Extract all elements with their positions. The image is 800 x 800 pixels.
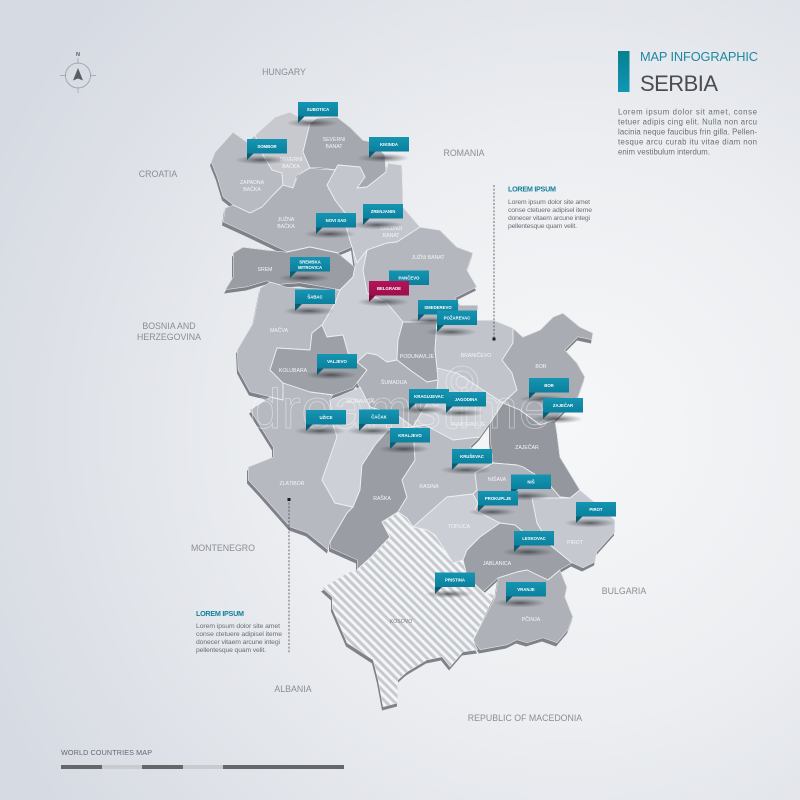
region: Toplica — [413, 494, 500, 563]
pin: Kruševac — [440, 449, 492, 474]
map of Serbia — [211, 112, 615, 707]
pin: Sremska Mitrovica — [278, 257, 330, 282]
pin: Pirot: PIROT — [589, 507, 603, 512]
region: Braničevo — [435, 320, 523, 403]
title: map infographic: MAP INFOGRAPHIC — [640, 49, 758, 64]
country labels: ALBANIA — [274, 684, 312, 694]
pin: Šabac: ŠABAC — [307, 294, 323, 300]
callout: top right: LOREM IPSUM — [508, 184, 556, 194]
title: Serbia: SERBIA — [640, 71, 718, 96]
pin: Sombor — [235, 139, 287, 164]
intro paragraph — [618, 108, 757, 156]
pin: Subotica — [286, 102, 338, 128]
title block — [618, 49, 758, 96]
region: Jablanica — [463, 523, 572, 592]
region labels: MORAVICA — [346, 399, 374, 405]
region labels: SEVERNI — [280, 157, 302, 163]
intro paragraph: tetuer adipis cing elit. Nulla non arcu — [618, 118, 757, 126]
callout: bottom left: LOREM IPSUM — [196, 609, 244, 618]
pin: Belgrade: BELGRADE — [377, 286, 401, 291]
region labels: SREM — [258, 267, 272, 273]
pin: Leskovac: LESKOVAC — [522, 536, 546, 541]
region labels: JABLANICA — [483, 561, 512, 567]
callout: top right: donecer vitaem arcune integi — [508, 215, 590, 222]
region labels: BAČKA — [243, 186, 261, 193]
watermark: dreamstime — [250, 377, 550, 440]
country labels: ROMANIA — [443, 148, 485, 158]
pin: Niš — [499, 474, 551, 500]
pin: Kikinda: KIKINDA — [380, 142, 398, 147]
pin: Valjevo: VALJEVO — [327, 359, 348, 364]
region labels: JUŽNI BANAT — [411, 253, 445, 261]
intro paragraph: Lorem ipsum dolor sit amet, conse — [618, 108, 757, 116]
country labels — [137, 67, 646, 723]
pin: Smederevo: SMEDEREVO — [424, 305, 452, 310]
intro paragraph: tesque arcu curab itu vitae diam non — [618, 138, 757, 146]
region: Moravica — [322, 387, 413, 507]
pin: Priština: PRISTINA — [445, 578, 465, 582]
pin: Priština — [425, 572, 475, 598]
region: Srem — [225, 247, 355, 290]
region: Pomoravlje — [413, 368, 503, 440]
region labels: ZLATIBOR — [280, 481, 305, 487]
callout: bottom left: conse ctetuere adipisel iteme — [196, 631, 282, 638]
country labels: MONTENEGRO — [191, 543, 255, 553]
pin: Požarevac — [425, 310, 477, 336]
region: Severna Bačka — [255, 112, 310, 188]
country labels: HERZEGOVINA — [137, 332, 201, 342]
callout: bottom left: donecer vitaem arcune integi — [196, 639, 280, 646]
country labels: BOSNIA AND — [142, 321, 196, 331]
region: Rasina — [398, 425, 493, 527]
region: Podunavlje — [397, 322, 438, 382]
pin: Zrenjanin: ZRENJANIN — [371, 209, 395, 214]
region labels: TOPLICA — [448, 524, 471, 530]
callout: top right: Lorem ipsum dolor site amet — [508, 199, 590, 206]
pin: Prokuplje: PROKUPLJE — [485, 496, 511, 501]
region: Nišava — [474, 462, 570, 531]
region labels: RAŠKA — [373, 495, 391, 502]
pin: Kragujevac: KRAGUJEVAC — [414, 394, 444, 399]
pin: Jagodina — [436, 392, 486, 417]
pin: Zrenjanin — [351, 204, 403, 230]
pin: Vranje — [494, 582, 546, 608]
icon: compass: N — [76, 52, 80, 58]
pin: Belgrade — [357, 281, 409, 306]
region labels: ZAPADNA — [240, 180, 265, 186]
pin: Pančevo — [389, 270, 429, 285]
region labels: BRANIČEVO — [461, 352, 491, 359]
pin: Zaječar — [531, 398, 583, 424]
region labels: POMORAVLJE — [450, 422, 486, 428]
pin: Smederevo — [408, 300, 458, 325]
pin: Čačak — [347, 410, 399, 436]
callout: bottom left: pellentesque quam velit. — [196, 647, 266, 654]
pin: Užice: UŽICE — [320, 415, 333, 420]
region labels: BAČKA — [277, 223, 295, 230]
region: Južni Banat — [363, 227, 478, 322]
country labels: BULGARIA — [602, 586, 646, 596]
region labels: BANAT — [326, 144, 343, 150]
region labels: JUŽNA — [278, 215, 295, 223]
pin: Bor: BOR — [544, 383, 555, 388]
region labels: PIROT — [567, 540, 584, 546]
region: Srednji Banat — [327, 163, 420, 263]
region labels: KOLUBARA — [279, 368, 308, 374]
title accent bar — [618, 51, 630, 92]
pin: Jagodina: JAGODINA — [455, 397, 477, 402]
pin: Kragujevac — [399, 389, 449, 414]
pin: Užice — [294, 410, 346, 436]
region labels: RASINA — [419, 484, 439, 490]
footer label: WORLD COUNTRIES MAP — [61, 748, 152, 757]
region: Bor — [502, 313, 593, 425]
region labels: NIŠAVA — [488, 476, 507, 483]
region labels: BANAT — [383, 233, 400, 239]
country labels: HUNGARY — [262, 67, 306, 77]
callout: bottom left: Lorem ipsum dolor site amet — [196, 623, 280, 630]
callout: top right — [492, 184, 592, 340]
region: Kolubara — [270, 325, 367, 395]
region labels: ŠUMADIJA — [381, 379, 408, 386]
intro paragraph: lacinia neque faucibus frin gilla. Pellen- — [618, 128, 757, 136]
region: Severni Banat — [303, 117, 386, 188]
region: Šumadija — [357, 353, 438, 427]
pin: Novi Sad: NOVI SAD — [326, 218, 346, 223]
region: Zlatibor — [248, 383, 353, 550]
callout: top right: pellentesque quam velit. — [508, 223, 577, 230]
pin: Valjevo — [305, 354, 357, 380]
pin: Zaječar: ZAJEČAR — [553, 403, 574, 408]
pin: Kruševac: KRUŠEVAC — [460, 454, 484, 459]
region labels: PODUNAVLJE — [400, 354, 435, 360]
pin: Kraljevo: KRALJEVO — [398, 433, 422, 438]
region: Pčinja — [473, 570, 573, 650]
region labels: SREDNJI — [380, 226, 402, 232]
region: Mačva — [237, 282, 340, 400]
region labels: KOSOVO — [390, 619, 412, 625]
callout: bottom left — [196, 498, 290, 654]
pin: Šabac — [283, 290, 335, 316]
pin: Niš: NIŠ — [527, 480, 535, 484]
pin: Prokuplje — [468, 491, 518, 516]
icon: compass — [60, 52, 96, 93]
pin: Subotica: SUBOTICA — [307, 107, 329, 112]
region: Južna Bačka — [223, 168, 352, 253]
pin: Pančevo: PANČEVO — [399, 276, 420, 280]
callout: top right: conse ctetuere adipisel iteme — [508, 207, 592, 214]
region: Belgrade — [322, 247, 403, 362]
scale bar — [61, 765, 344, 769]
pin: Novi Sad — [304, 213, 356, 238]
pin: Vranje: VRANJE — [517, 587, 535, 592]
country labels: CROATIA — [139, 169, 177, 179]
region: Zaječar — [490, 403, 580, 498]
region: Pirot — [532, 490, 615, 568]
pin: Sombor: SOMBOR — [257, 144, 278, 149]
pin: Kraljevo — [378, 428, 430, 454]
region: Kosovo — [322, 512, 495, 707]
region labels: MAČVA — [270, 327, 289, 334]
pin: Bor — [519, 378, 569, 403]
pin: Leskovac — [502, 531, 554, 556]
pin: Kikinda — [357, 137, 409, 162]
region: Zapadna Bačka — [211, 132, 283, 213]
region labels: ZAJEČAR — [515, 444, 539, 451]
pin: Sremska Mitrovica: MITROVICA — [298, 265, 322, 270]
region labels: BAČKA — [282, 163, 300, 170]
country labels: REPUBLIC OF MACEDONIA — [468, 713, 582, 723]
region: Raška — [330, 427, 415, 570]
pin: Sremska Mitrovica: SREMSKA — [299, 260, 321, 264]
intro paragraph: enim vestibulum interdum. — [618, 148, 710, 156]
region labels — [240, 137, 584, 625]
pin: Pirot — [564, 502, 616, 528]
region labels: SEVERNI — [323, 137, 345, 143]
region labels: BOR — [535, 364, 547, 370]
pin: Požarevac: POŽAREVAC — [444, 316, 470, 320]
region labels: PČINJA — [522, 616, 541, 623]
pin: Čačak: ČAČAK — [371, 414, 388, 420]
